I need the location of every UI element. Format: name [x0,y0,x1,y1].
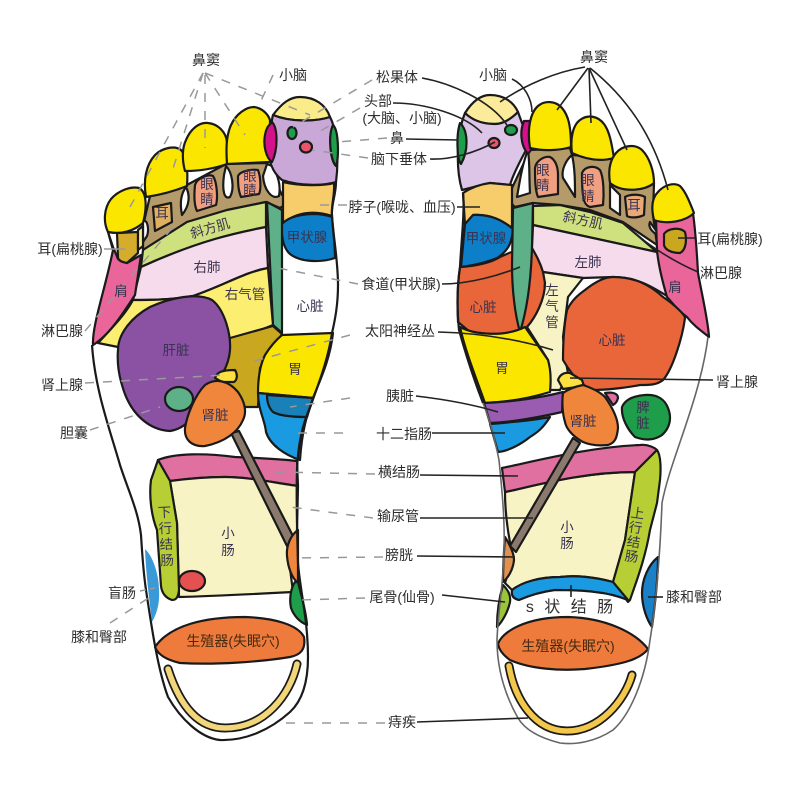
centre and outer labels: 胆囊 [60,425,88,441]
labels inside left foot: 睛 [243,183,257,198]
spleen [622,395,670,439]
right toe 2 [571,117,614,160]
gallbladder [165,387,193,411]
centre and outer labels: 小脑 [479,67,507,83]
labels inside right foot: 脾 [636,400,650,415]
centre and outer labels: 输尿管 [377,508,419,524]
stomach [258,333,333,398]
labels inside right foot: 上 [630,505,645,522]
labels inside right foot: 左 [545,283,559,298]
labels inside left foot: 肠 [221,543,235,558]
small brain right [521,121,531,154]
coccyx [290,582,307,625]
thyroid [282,214,335,261]
labels inside right foot: 胃 [495,361,509,376]
eye box left 2 [238,170,260,197]
esophagus right [512,203,533,332]
pituitary right [488,138,500,148]
labels inside left foot: 斜方肌 [189,216,232,241]
labels inside right foot: 甲状腺 [466,231,507,246]
neck right [463,183,512,228]
nose patch [330,125,338,166]
centre and outer labels: 鼻窦 [580,49,608,65]
centre and outer labels: 头部 [364,93,392,109]
centre and outer labels: 小脑 [279,67,307,83]
appendix [179,571,205,591]
right web [510,148,657,245]
labels inside right foot: 心脏 [470,300,496,315]
labels inside left foot: 肠 [160,553,174,568]
hemorrhoid right outer [509,666,632,731]
labels inside left foot: 耳 [155,206,169,221]
toe 2 [145,148,187,197]
big toe cap [273,97,330,121]
cecum [145,549,159,622]
labels inside right foot: 眼 [536,163,550,178]
solid leaders right foot [393,67,713,722]
right trapezius [533,205,657,252]
centre and outer labels: 脑下垂体 [371,151,427,167]
labels inside left foot: 睛 [200,192,214,207]
big toe cap right [465,95,518,124]
labels inside left foot: 眼 [200,177,214,192]
pineal right [505,125,517,135]
right foot [457,95,709,744]
right lung [133,227,268,300]
stomach right [460,327,551,403]
left bronchi [527,272,583,390]
sole base [92,97,338,740]
bladder [287,530,298,583]
right toe 1 [529,102,571,150]
left foot [92,97,338,740]
centre and outer labels: 肾上腺 [716,374,758,390]
descending colon [150,460,179,600]
centre and outer labels: 膝和臀部 [666,589,722,605]
centre and outer labels: 盲肠 [108,585,136,601]
gaps between toes [143,164,280,242]
labels inside right foot: 管 [545,315,559,330]
centre and outer labels: 肾上腺 [41,377,83,393]
labels inside left foot: 胃 [288,362,302,377]
adrenal right [558,373,584,389]
labels inside right foot: 斜方肌 [562,209,605,232]
ear box right [625,195,645,217]
shoulder right [656,213,709,337]
dashed leaders left foot [85,73,387,723]
labels inside right foot: 行 [628,520,643,536]
big toe brain right [458,112,527,190]
sigmoid colon [512,576,628,600]
labels inside right foot: 生殖器(失眠穴) [521,638,615,654]
centre and outer labels: 鼻窦 [192,52,220,68]
labels inside right foot: 睛 [536,178,550,193]
esophagus [267,202,282,333]
eye box right 1 [535,157,558,197]
ascending colon [613,450,661,602]
ear box [153,203,172,231]
duodenum right [490,417,550,452]
labels inside left foot: 肩 [114,284,128,299]
labels inside right foot: s 状 结 肠 [526,598,616,616]
liver [118,296,230,431]
outline upper [457,193,483,403]
centre and outer labels: 淋巴腺 [41,323,83,339]
small pink [605,393,618,405]
left genital [155,617,304,664]
centre and outer labels: 脖子(喉咙、血压) [348,199,456,215]
knee right [642,557,658,627]
centre and outer labels: 痔疾 [388,714,416,730]
right kidney [562,385,618,445]
tonsil right [664,229,686,253]
big heart [563,277,685,390]
right small intestine [505,472,635,590]
pineal [288,127,296,139]
tonsil [117,232,138,263]
nose patch right [457,123,467,164]
pancreas right [484,392,563,423]
big toe brain [270,115,337,185]
centre and outer labels: 尾骨(仙骨) [369,589,435,605]
toe 1 [105,188,146,233]
centre and outer labels: 十二指肠 [376,426,432,442]
right toe gaps [517,150,657,235]
centre and outer labels [37,49,763,730]
left ureter [231,431,294,546]
centre and outer labels: 鼻 [390,130,404,146]
coccyx right [497,585,510,627]
outline [92,182,338,740]
labels inside right foot: 左肺 [574,255,602,270]
left lung [532,225,670,298]
right genital [498,617,648,670]
labels inside right foot: 结 [626,534,641,551]
small brain patch [264,122,276,162]
labels inside right foot: 肾脏 [570,414,596,429]
left small intestine [170,477,298,597]
labels inside right foot: 肠 [624,548,639,565]
left adrenal [215,370,237,382]
labels inside left foot: 右肺 [194,260,220,275]
centre and outer labels: 耳(扁桃腺) [37,241,103,257]
outline lower [483,337,708,744]
labels inside right foot: 心脏 [598,333,626,348]
hemorrhoid right fill [509,666,632,731]
toe 3 [183,123,228,171]
centre and outer labels: 耳(扁桃腺) [697,231,763,247]
right toe 3 [609,146,654,190]
centre and outer labels: 淋巴腺 [700,265,742,281]
labels inside left foot: 心脏 [296,299,324,314]
toe 4 [226,107,270,164]
pituitary [300,142,312,152]
right transverse colon [502,445,657,492]
labels inside left foot: 小 [221,526,235,541]
labels inside left foot: 肝脏 [162,343,190,358]
thyroid right [461,215,513,267]
dark yellow region [222,326,282,407]
right bronchi [98,268,273,347]
centre and outer labels: 松果体 [376,69,418,85]
labels inside right foot: 眼 [581,173,595,188]
sole base [457,95,709,744]
labels inside right foot: 脏 [636,416,650,431]
labels inside left foot: 生殖器(失眠穴) [186,633,280,649]
labels inside left foot: 眼 [243,169,257,184]
labels inside right foot: 小 [560,520,574,535]
labels inside left foot: 肾脏 [202,408,228,423]
neck [283,182,334,224]
web between toes [143,163,287,250]
centre and outer labels: 横结肠 [378,464,420,480]
trapezius [141,202,266,267]
duodenum [258,393,313,460]
hemorrhoid fill left [168,664,297,728]
heart left blob [458,247,545,336]
hemorrhoid band left [168,664,297,728]
labels inside left foot: 甲状腺 [287,230,328,245]
centre and outer labels: 膀胱 [385,547,413,563]
labels inside left foot: 结 [159,537,173,552]
labels inside left foot: 右气管 [225,287,265,302]
eye box left 1 [194,175,217,211]
labels inside right foot [466,163,682,654]
labels inside right foot: 睛 [581,189,595,204]
bladder right [503,537,514,582]
centre and outer labels: 胰脏 [386,388,414,404]
labels inside right foot: 肠 [560,536,574,551]
eye box right 2 [582,167,604,207]
left transverse colon [158,454,298,486]
pancreas [267,395,313,417]
labels inside left foot: 下 [157,505,172,520]
labels inside right foot: 气 [545,299,559,314]
centre and outer labels: 太阳神经丛 [365,323,435,339]
labels inside left foot: 行 [158,521,173,536]
centre and outer labels: 食道(甲状腺) [361,276,441,292]
tonsil strip [138,226,143,250]
labels inside right foot: 耳 [627,198,641,213]
labels inside left foot [114,169,328,649]
left kidney [185,381,245,446]
centre and outer labels: (大脑、小脑) [362,110,442,126]
centre and outer labels: 膝和臀部 [71,629,127,645]
right toe 4 [652,184,694,222]
right ureter [510,438,580,552]
shoulder [93,232,141,345]
labels inside right foot: 肩 [668,280,682,295]
